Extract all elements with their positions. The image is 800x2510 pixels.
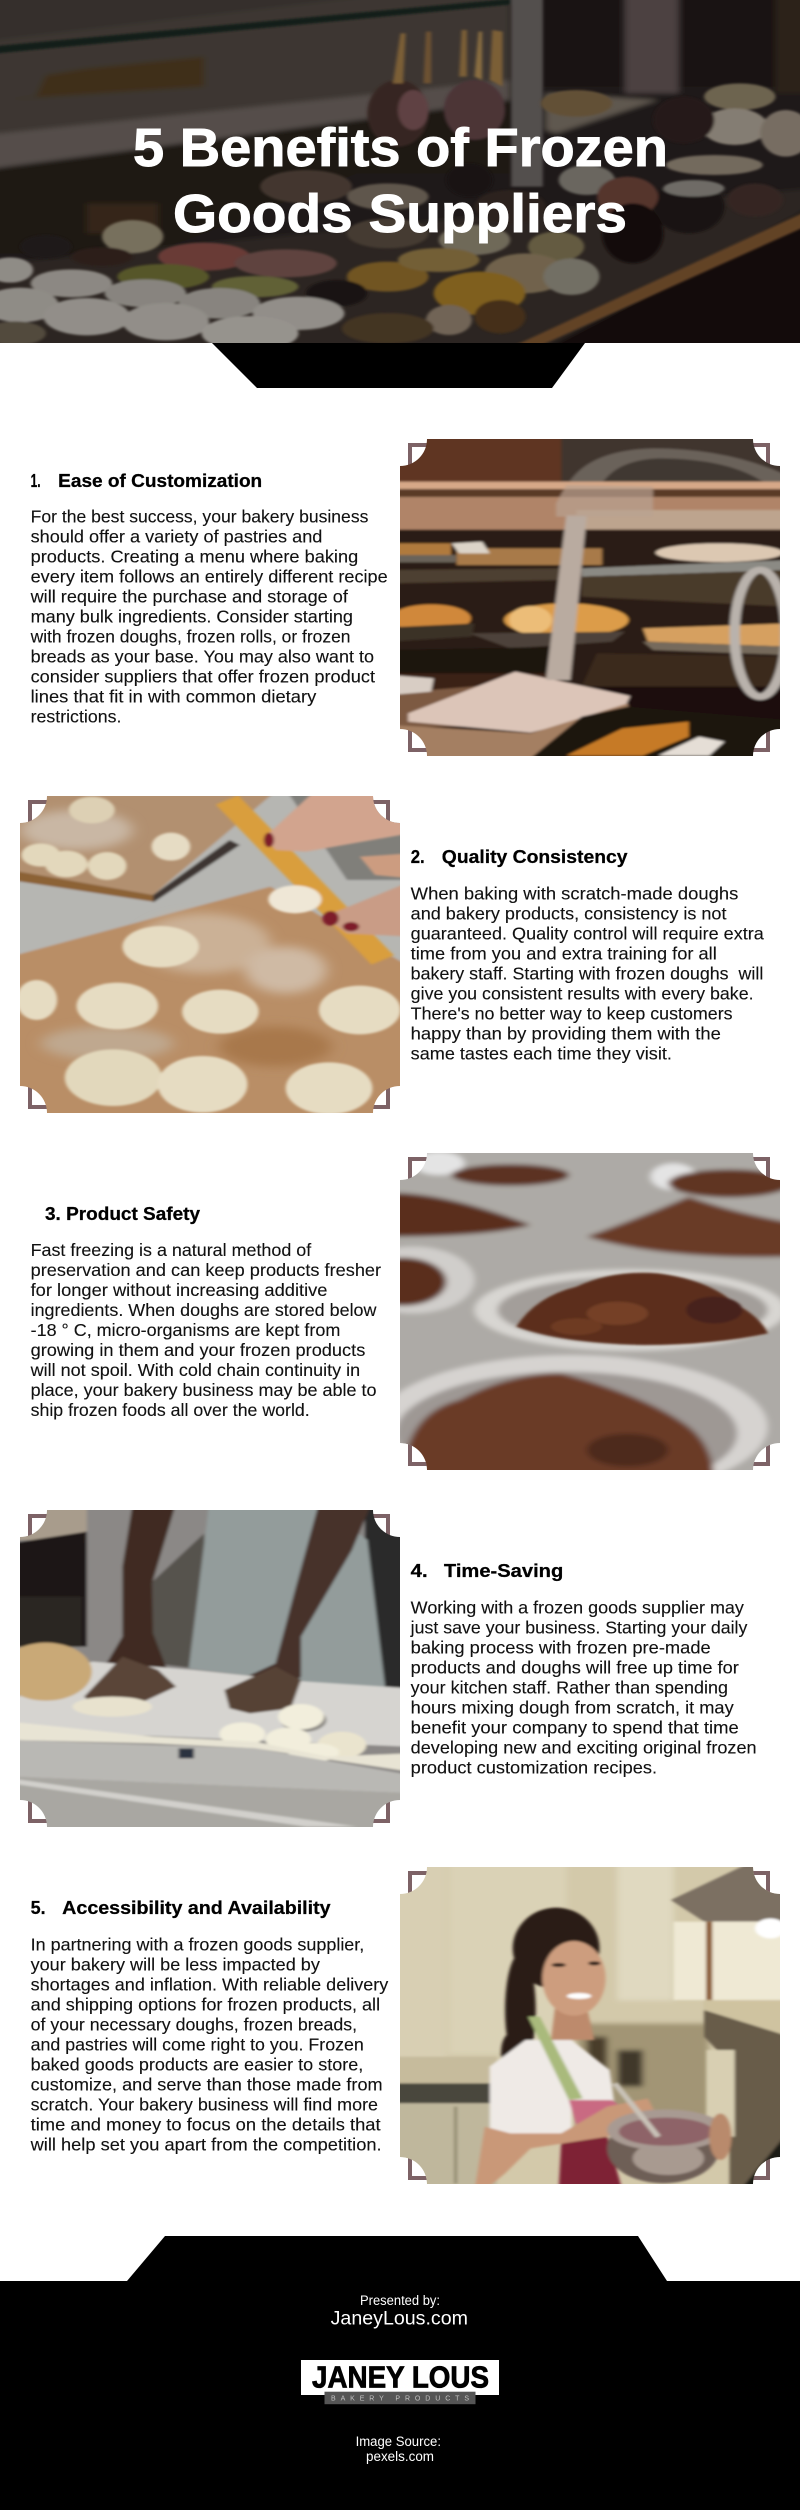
body text 3: growing in them and your frozen products	[31, 1340, 366, 1360]
heading 1: Ease of Customization	[58, 471, 262, 491]
body text 5: of your necessary doughs, frozen breads,	[31, 2014, 357, 2034]
body text 4: your kitchen staff. Rather than spending	[411, 1677, 728, 1697]
body text 2: same tastes each time they visit.	[411, 1043, 672, 1063]
corner frame 3	[410, 1159, 768, 1464]
body text 2: give you consistent results with every bake.	[411, 983, 754, 1003]
corner frame 1	[410, 445, 768, 750]
footer: presented by: JaneyLous.com	[331, 2307, 468, 2329]
heading 4: Time-Saving	[444, 1561, 563, 1581]
body text 5: will help set you apart from the competition.	[30, 2134, 382, 2154]
photo 4: baker pressing dough on a table	[20, 1510, 400, 1827]
body text 1: will require the purchase and storage of	[30, 586, 348, 606]
body text 1: every item follows an entirely different recipe	[31, 566, 388, 586]
body text 1: restrictions.	[31, 706, 121, 726]
body text 1: with frozen doughs, frozen rolls, or frozen	[30, 626, 351, 646]
heading 4	[411, 1561, 563, 1581]
body text 3: place, your bakery business may be able to	[31, 1380, 376, 1400]
photo 5: smiling woman whisking in a kitchen	[390, 1860, 790, 2190]
heading 5: Accessibility and Availability	[62, 1898, 331, 1918]
body text 1: products. Creating a menu where baking	[31, 546, 358, 566]
body text 2: There's no better way to keep customers	[411, 1003, 733, 1023]
body text 3: Fast freezing is a natural method of	[31, 1240, 311, 1260]
body text 5: your bakery will be less impacted by	[31, 1954, 320, 1974]
heading 4: 4.	[411, 1561, 428, 1581]
body text 1: breads as your base. You may also want to	[31, 646, 374, 666]
logo: Janey Lous Bakery Products: BAKERY PRODUCTS	[331, 2396, 469, 2402]
footer: image source	[356, 2434, 441, 2464]
body text 5: and pastries will come right to you. Frozen	[31, 2034, 364, 2054]
body text 1: should offer a variety of pastries and	[31, 526, 322, 546]
body text 5: baked goods products are easier to store,	[31, 2054, 363, 2074]
body text 4: benefit your company to spend that time	[411, 1717, 739, 1737]
hero banner photo with title	[0, 0, 800, 367]
black trapezoid below hero	[212, 343, 585, 388]
footer: presented by	[331, 2293, 468, 2329]
photo 3: chocolate muffins in a tin	[400, 1153, 780, 1470]
body text 5: In partnering with a frozen goods supplier,	[31, 1934, 364, 1954]
body text 2: happy than by providing them with the	[411, 1023, 721, 1043]
body text 4: Working with a frozen goods supplier may	[411, 1597, 744, 1617]
body text 2: time from you and extra training for all	[411, 943, 717, 963]
title: 5 Benefits of Frozen	[133, 118, 668, 178]
title: Goods Suppliers	[173, 184, 627, 244]
dark overlay	[0, 0, 800, 353]
body text 4: product customization recipes.	[411, 1757, 657, 1777]
section 4: Time-Saving	[0, 1503, 757, 1833]
logo: Janey Lous Bakery Products: JANEY LOUS	[312, 2360, 489, 2395]
section 5: Accessibility and Availability	[30, 1860, 790, 2190]
body text 4: hours mixing dough from scratch, it may	[411, 1697, 734, 1717]
body text 5: time and money to focus on the details that	[31, 2114, 381, 2134]
heading 5: 5.	[31, 1898, 46, 1918]
photo 1: pastry display case	[390, 432, 790, 762]
section 3: Product Safety	[30, 1153, 780, 1470]
body text 3: -18 ° C, micro-organisms are kept from	[31, 1320, 340, 1340]
body text 2: bakery staff. Starting with frozen doughs will	[411, 963, 763, 983]
body text 5: shortages and inflation. With reliable delivery	[31, 1974, 389, 1994]
body text 2: and bakery products, consistency is not	[411, 903, 727, 923]
body text 1	[30, 506, 388, 726]
body text 5: scratch. Your bakery business will find more	[31, 2094, 378, 2114]
body text 3: ingredients. When doughs are stored below	[31, 1300, 377, 1320]
body text 4: baking process with frozen pre-made	[411, 1637, 711, 1657]
body text 2: guaranteed. Quality control will require extra	[411, 923, 764, 943]
heading 3: 3. Product Safety	[45, 1204, 200, 1224]
heading 2: Quality Consistency	[442, 847, 628, 867]
body text 5	[30, 1934, 389, 2154]
body text 1: For the best success, your bakery business	[31, 506, 369, 526]
body text 3: ship frozen foods all over the world.	[31, 1400, 310, 1420]
body text 5: customize, and serve than those made from	[31, 2074, 383, 2094]
body text 3: preservation and can keep products fresher	[31, 1260, 381, 1280]
footer black band	[0, 2236, 800, 2510]
footer: presented by: Presented by:	[360, 2293, 440, 2308]
body text 4: developing new and exciting original frozen	[411, 1737, 757, 1757]
body text 4	[410, 1597, 757, 1777]
corner frame 5	[410, 1873, 768, 2178]
section 2: Quality Consistency	[10, 789, 764, 1119]
hero photo: bakery display case	[0, 0, 800, 367]
body text 3	[30, 1240, 381, 1420]
body text 3: will not spoil. With cold chain continuity in	[30, 1360, 360, 1380]
body text 2: When baking with scratch-made doughs	[411, 883, 739, 903]
body text 4: products and doughs will free up time for	[411, 1657, 739, 1677]
glass shelf edge, pillar and table edge	[0, 0, 800, 350]
body text 2	[411, 883, 764, 1063]
title	[133, 118, 668, 244]
body text 4: just save your business. Starting your daily	[410, 1617, 748, 1637]
body text 1: consider suppliers that offer frozen product	[31, 666, 375, 686]
body text 5: and shipping options for frozen products, all	[31, 1994, 380, 2014]
corner frame 2	[30, 802, 388, 1107]
heading 2: 2.	[411, 847, 425, 867]
flour patches	[20, 810, 332, 1067]
footer: image source: Image Source:	[356, 2434, 441, 2449]
corner frame 4	[30, 1516, 388, 1821]
body text 1: lines that fit in with common dietary	[31, 686, 317, 706]
body text 3: for longer without increasing additive	[31, 1280, 327, 1300]
heading 1: 1.	[31, 471, 41, 491]
section 1: Ease of Customization	[30, 432, 790, 762]
body text 1: many bulk ingredients. Consider starting	[31, 606, 353, 626]
hero pastries	[0, 30, 800, 351]
photo 2: dough on a floured board with rolling pin	[10, 789, 410, 1119]
footer: image source: pexels.com	[366, 2449, 434, 2464]
